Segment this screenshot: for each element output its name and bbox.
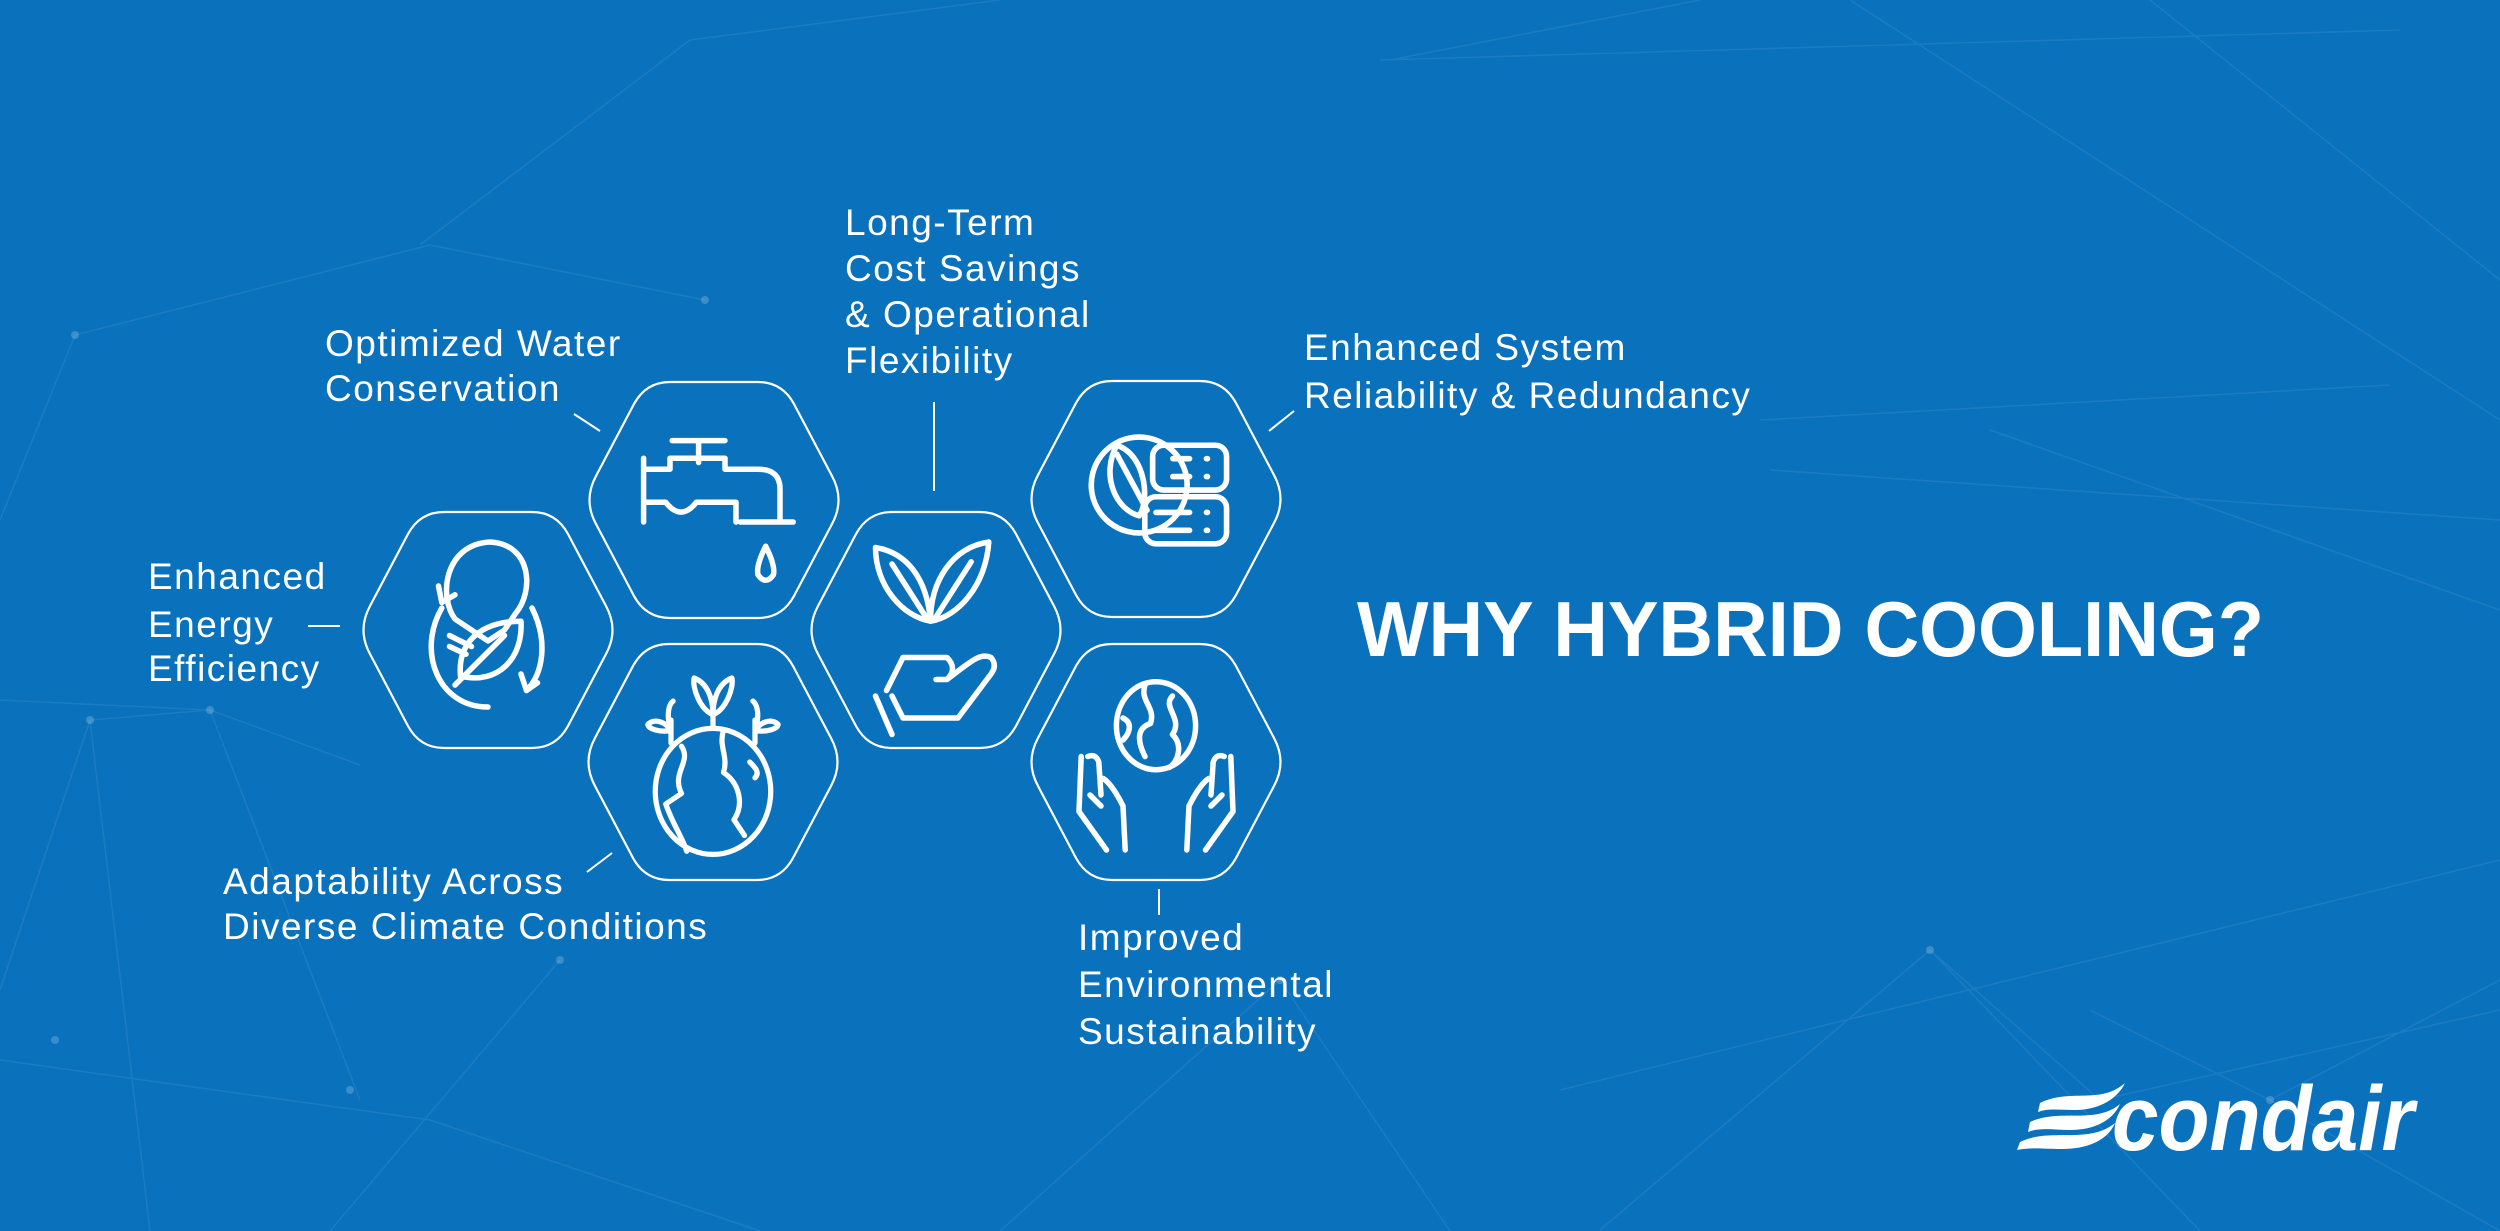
hexagon: climate adaptability [588,644,838,880]
label: environmental sustainability [1078,889,1334,1052]
logo: condair: condair [2112,1068,2418,1170]
label: reliability: Reliability & Redundancy [1304,375,1751,416]
label: environmental sustainability: Improved [1078,917,1244,958]
label: reliability [1269,327,1751,431]
label: water conservation: Conservation [325,368,561,409]
label: water conservation [325,323,622,431]
label: cost savings: & Operational [845,294,1091,335]
label: energy efficiency: Energy [148,604,274,645]
label: reliability: Enhanced System [1304,327,1627,368]
label: environmental sustainability: Environmental [1078,964,1334,1005]
label: water conservation: Optimized Water [325,323,622,364]
label: energy efficiency [148,556,340,689]
icon: leaf with server racks [1091,437,1227,544]
label: climate adaptability: Diverse Climate Conditions [223,906,708,947]
label: climate adaptability [223,853,708,947]
label: cost savings: Cost Savings [845,248,1081,289]
label: energy efficiency: Enhanced [148,556,327,597]
icon: globe with sprouts [648,678,778,854]
label: cost savings: Flexibility [845,340,1014,381]
icon: waves [2017,1083,2125,1150]
hexagon: water conservation [590,382,838,618]
hexagon: reliability & redundancy [1032,381,1280,617]
icon: bulb with leaf and cycle arrows [431,542,542,707]
icon: hands holding globe [1079,682,1233,850]
icon: faucet with drop [644,441,793,580]
label: energy efficiency: Efficiency [148,648,321,689]
label: environmental sustainability: Sustainability [1078,1011,1317,1052]
hexagon: energy efficiency [364,512,612,748]
label: cost savings [845,202,1091,491]
label: cost savings: Long-Term [845,202,1035,243]
icon: plant in hand [876,542,994,734]
label: climate adaptability: Adaptability Across [223,861,564,902]
hexagon: environmental sustainability [1032,644,1280,880]
title: WHY HYBRID COOLING? [1357,585,2264,673]
hexagon: cost savings [812,512,1060,748]
